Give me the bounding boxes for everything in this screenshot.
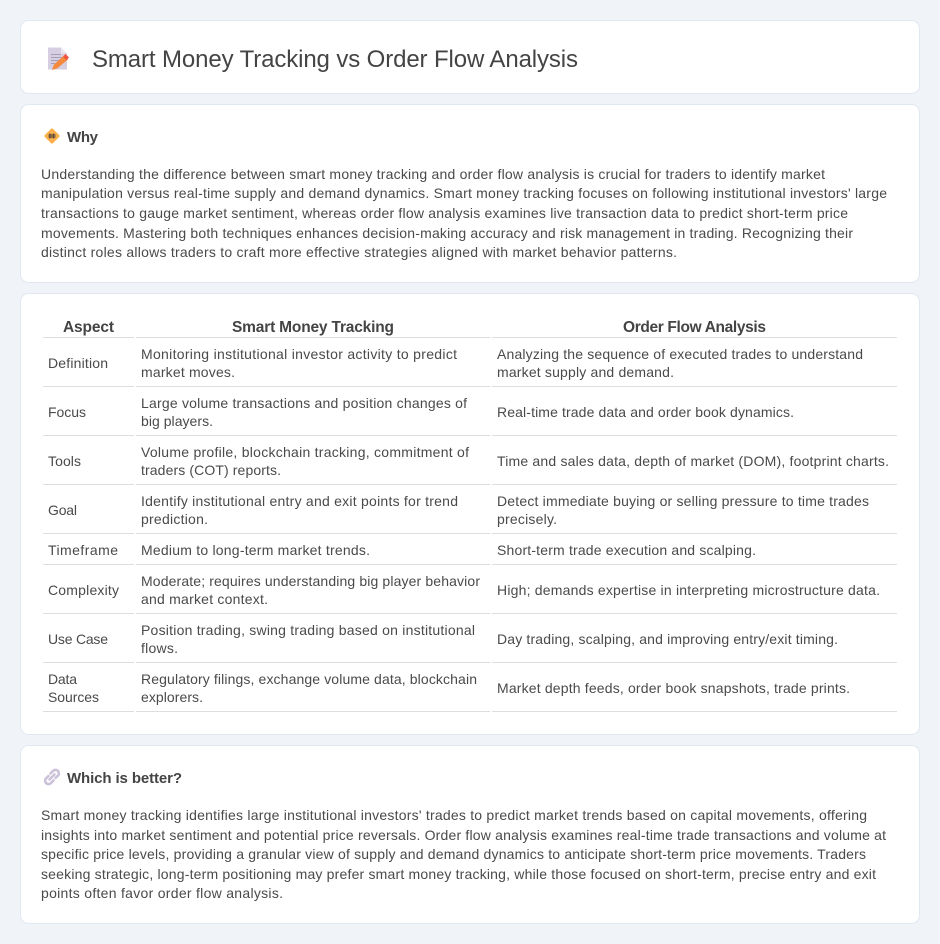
row: complexity: High; demands expertise in interpreting microstructure data.	[497, 582, 880, 598]
row: data sources: Regulatory filings, exchange volume data, blockchain	[141, 671, 477, 687]
row: definition: market supply and demand.	[497, 364, 674, 380]
row: use case: flows.	[141, 640, 178, 656]
heading: why: Why	[67, 129, 99, 146]
text block: which is better	[41, 807, 886, 901]
table header	[63, 319, 766, 336]
text block: which is better: points often favor order flow analysis.	[41, 885, 283, 901]
row: data sources: Sources	[48, 689, 99, 705]
row: definition	[48, 346, 863, 380]
row: use case: Position trading, swing trading based on institutional	[141, 622, 475, 638]
row: tools: Volume profile, blockchain tracking, commitment of	[141, 444, 469, 460]
row: timeframe: Timeframe	[48, 542, 118, 558]
text block: which is better: specific price levels, providing a granular view of supply and demand dynamics to anticipate short-term price movements. Traders	[41, 846, 866, 862]
text block: why: movements. Mastering both techniques enhances decision-making accuracy and risk management in trading. Recognizing their	[41, 225, 853, 241]
text block: why	[41, 166, 887, 260]
row: focus: Focus	[48, 404, 86, 420]
icon: document with pencil	[48, 48, 69, 70]
text block: why: manipulation versus real-time supply and demand dynamics. Smart money tracking focuses on following institutional investors' large	[41, 185, 887, 201]
row: definition: Analyzing the sequence of executed trades to understand	[497, 346, 863, 362]
row: complexity	[48, 573, 880, 607]
text block: which is better: insights into market sentiment and potential price reversals. Order flow analysis examines real-time trade transactions and volume at	[41, 827, 886, 843]
row: tools: Time and sales data, depth of market (DOM), footprint charts.	[497, 453, 889, 469]
row: goal: prediction.	[141, 511, 208, 527]
row: focus: Large volume transactions and position changes of	[141, 395, 467, 411]
panel: comparison table	[20, 294, 920, 734]
table header: Aspect	[63, 319, 114, 336]
icon: link	[45, 770, 59, 784]
row: tools: Tools	[48, 453, 81, 469]
row: timeframe: Short-term trade execution and scalping.	[497, 542, 756, 558]
row: complexity: and market context.	[141, 591, 268, 607]
row: goal: precisely.	[497, 511, 557, 527]
row: tools	[48, 444, 889, 478]
row: definition: market moves.	[141, 364, 235, 380]
row: timeframe: Medium to long-term market trends.	[141, 542, 370, 558]
text block: which is better: seeking strategic, long-term positioning may prefer smart money tracking, while those focused on short-term, precise entry and exit	[41, 866, 876, 882]
row: complexity: Complexity	[48, 582, 119, 598]
heading: which is better: Which is better?	[67, 770, 182, 787]
row: focus	[48, 395, 794, 429]
text block: why: Understanding the difference between smart money tracking and order flow analysis is crucial for traders to identify market	[41, 166, 825, 182]
row: tools: traders (COT) reports.	[141, 462, 281, 478]
panel: why	[20, 104, 920, 282]
row: definition: Definition	[48, 355, 108, 371]
row: goal	[48, 493, 869, 527]
row: goal: Detect immediate buying or selling pressure to time trades	[497, 493, 869, 509]
text block: which is better: Smart money tracking identifies large institutional investors' trades to predict market trends based on capital movements, offering	[41, 807, 867, 823]
row: focus: Real-time trade data and order book dynamics.	[497, 404, 794, 420]
row: complexity: Moderate; requires understanding big player behavior	[141, 573, 480, 589]
text block: why: transactions to gauge market sentiment, whereas order flow analysis examines live transaction data to predict short-term price	[41, 205, 848, 221]
row: data sources: Market depth feeds, order book snapshots, trade prints.	[497, 680, 850, 696]
row: data sources	[48, 671, 850, 705]
row: focus: big players.	[141, 413, 213, 429]
text block: why: distinct roles allows traders to craft more effective strategies aligned with market behavior patterns.	[41, 244, 677, 260]
row: definition: Monitoring institutional investor activity to predict	[141, 346, 457, 362]
icon: warning diamond	[44, 128, 60, 144]
row: goal: Goal	[48, 502, 77, 518]
row: use case	[48, 622, 838, 656]
row: goal: Identify institutional entry and exit points for trend	[141, 493, 458, 509]
row: use case: Use Case	[48, 631, 108, 647]
table header: Smart Money Tracking	[232, 319, 394, 336]
title: Smart Money Tracking vs Order Flow Analysis	[92, 46, 578, 73]
row: data sources: Data	[48, 671, 77, 687]
panel: which is better	[20, 746, 920, 924]
panel: title card	[20, 20, 920, 94]
row: data sources: explorers.	[141, 689, 203, 705]
row: use case: Day trading, scalping, and improving entry/exit timing.	[497, 631, 838, 647]
row: timeframe	[48, 542, 756, 558]
table header: Order Flow Analysis	[623, 319, 766, 336]
